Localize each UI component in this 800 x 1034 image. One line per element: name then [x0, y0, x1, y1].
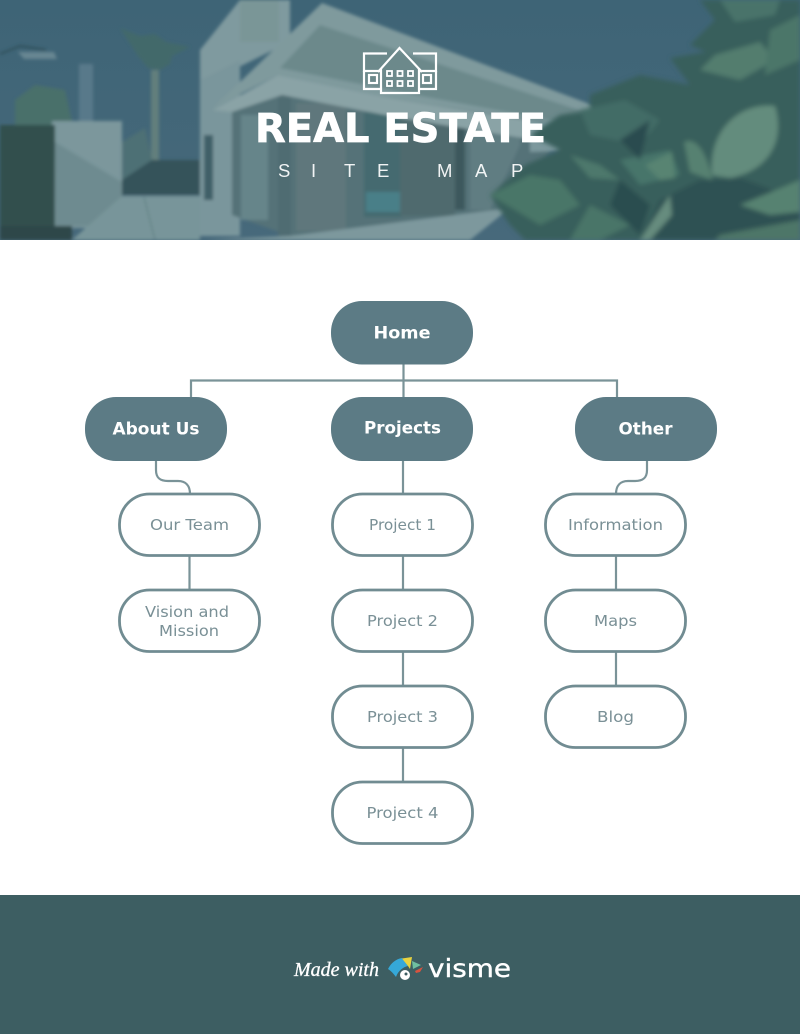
node: Our Team: Our Team — [150, 516, 229, 534]
mid shrubs behind — [122, 160, 200, 195]
node: Project 3: Project 3 — [367, 708, 438, 726]
left wall and garden — [16, 86, 70, 124]
node: Project 4 — [332, 782, 472, 844]
icon: visme logo — [388, 957, 423, 980]
node: Maps — [546, 590, 686, 652]
node: Project 1: Project 1 — [369, 516, 436, 534]
foliage — [490, 0, 800, 240]
node: Information — [546, 494, 686, 556]
lamp and post — [0, 46, 46, 54]
node: About Us: About Us — [112, 420, 200, 440]
node: Maps: Maps — [594, 612, 637, 630]
node: Vision and Mission: Vision and — [145, 603, 229, 621]
node: Project 4: Project 4 — [366, 804, 438, 822]
icon: house outline — [364, 48, 436, 93]
footer: made with visme — [293, 954, 511, 983]
footer: made with visme: Made with — [293, 959, 379, 981]
node: Project 2 — [332, 590, 472, 652]
node: Project 3 — [332, 686, 472, 748]
palm tree — [151, 70, 159, 192]
node: Projects — [331, 397, 473, 461]
node: Home — [331, 301, 473, 364]
node: Other — [575, 397, 717, 461]
footer: made with visme: visme — [428, 954, 511, 983]
node: Information: Information — [568, 516, 663, 534]
glass front — [232, 95, 560, 236]
node: Projects: Projects — [364, 418, 441, 438]
header banner: photo of modern house with plants — [0, 0, 800, 240]
roof soffit — [238, 2, 592, 122]
side wall — [200, 60, 240, 236]
subtitle: SITEMAP — [278, 160, 523, 181]
footer band — [0, 895, 800, 1034]
node: Our Team — [120, 494, 260, 556]
paving — [72, 196, 200, 240]
node: Project 2: Project 2 — [367, 612, 438, 630]
terrace — [205, 208, 510, 240]
node: Other: Other — [618, 420, 673, 440]
node: Vision and Mission — [120, 590, 260, 652]
house upper wall and chimney — [200, 0, 290, 86]
connector lines — [156, 364, 647, 782]
title: REAL ESTATE — [255, 106, 546, 152]
node: Vision and Mission: Mission — [159, 622, 219, 640]
node: About Us — [85, 397, 227, 461]
node: Blog — [546, 686, 686, 748]
node: Home: Home — [374, 324, 430, 344]
node: Project 1 — [332, 494, 472, 556]
node: Blog: Blog — [597, 708, 634, 726]
